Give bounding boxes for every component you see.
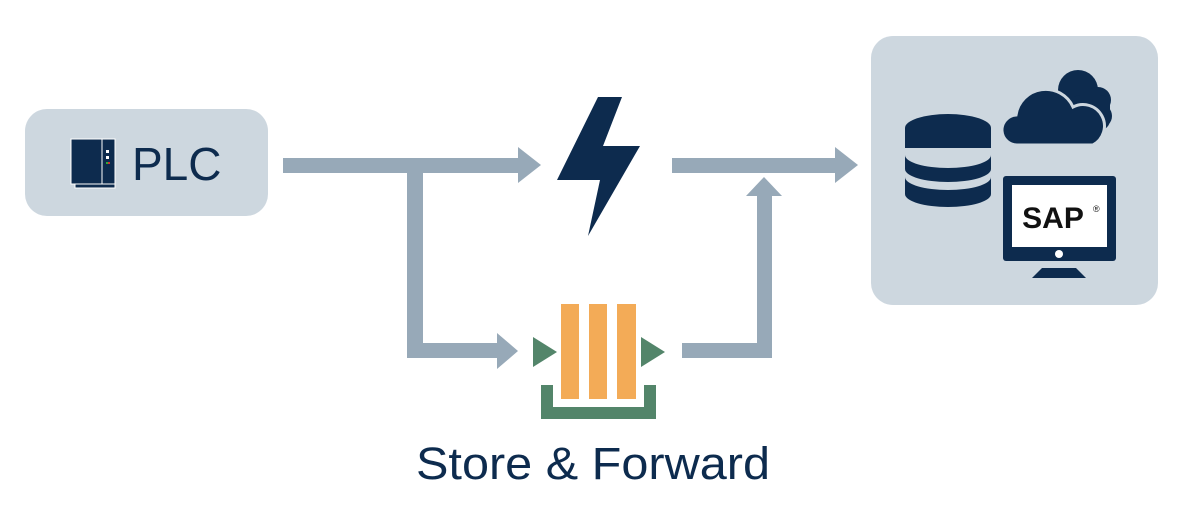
panel: PLC bbox=[25, 109, 268, 216]
icon: SAP monitor: ® bbox=[1093, 204, 1100, 214]
text: PLC: PLC bbox=[132, 138, 221, 190]
arrow: PLC to lightning bbox=[283, 147, 541, 183]
icon: lightning bbox=[557, 97, 640, 236]
icon: SAP monitor bbox=[1003, 176, 1116, 278]
panel: targets bbox=[871, 36, 1158, 305]
icon: SAP monitor: SAP bbox=[1022, 202, 1084, 235]
icon: PLC device bbox=[71, 139, 115, 188]
icon: clouds bbox=[1002, 70, 1112, 145]
arrow: branch down to store bbox=[407, 165, 518, 369]
icon: database bbox=[905, 114, 991, 207]
arrow: lightning to targets bbox=[672, 147, 858, 183]
arrow: store up to targets bbox=[682, 177, 782, 358]
icon: store and forward buffer bbox=[533, 304, 665, 419]
label: Store & Forward: Store & Forward bbox=[416, 438, 770, 489]
